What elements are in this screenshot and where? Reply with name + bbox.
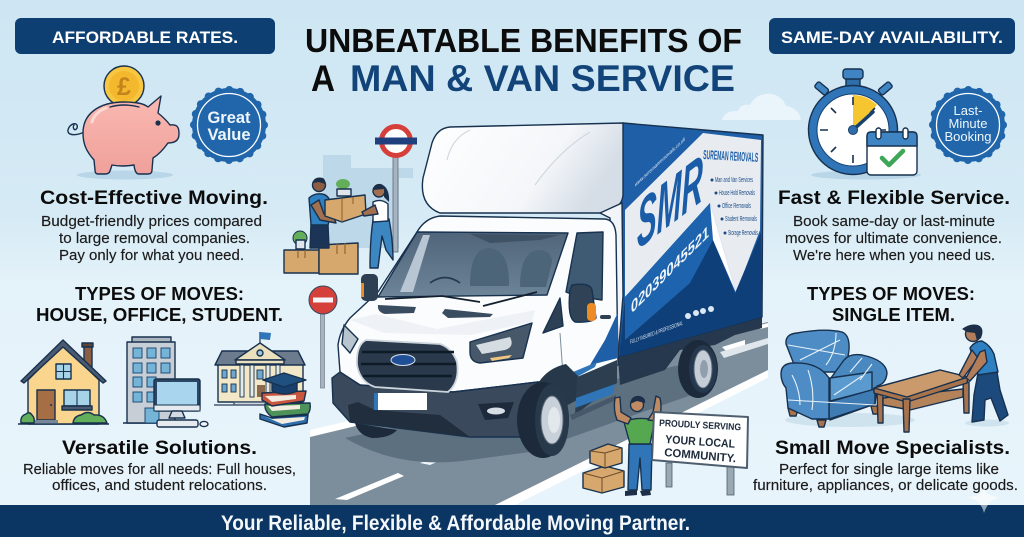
badge: last-minute booking: Last-	[954, 103, 982, 118]
text block: fast and flexible service: Fast & Flexible Service.	[778, 188, 1010, 209]
left headlight	[342, 325, 358, 353]
text block: small move specialists: Perfect for single large items like	[779, 462, 999, 478]
footer banner	[0, 505, 1024, 537]
rear chassis and wheel	[618, 317, 762, 398]
scene: faded city skyline	[323, 155, 413, 248]
number plate	[374, 393, 427, 410]
text block: versatile solutions: offices, and student relocations.	[52, 478, 267, 494]
text block: cost-effective moving: Budget-friendly prices compared	[41, 214, 262, 230]
grille	[357, 340, 458, 392]
text block: fast and flexible service	[778, 188, 1010, 264]
title: A	[311, 58, 335, 99]
stacked boxes	[583, 444, 624, 493]
lower intake	[348, 402, 470, 437]
icon: piggy bank with pound coin	[68, 66, 179, 180]
social icons	[685, 306, 714, 319]
carried box and plant	[325, 179, 366, 222]
community sign: YOUR LOCAL	[665, 434, 735, 451]
badge: last-minute booking: Booking	[945, 129, 991, 144]
text block: small move specialists: furniture, appliances, or delicate goods.	[753, 478, 1018, 494]
title: UNBEATABLE BENEFITS OF	[305, 22, 742, 59]
windscreen	[378, 232, 568, 306]
man	[309, 178, 336, 248]
heading pill: affordable rates: AFFORDABLE RATES.	[52, 28, 238, 47]
community sign: COMMUNITY.	[664, 447, 737, 465]
icon: stopwatch with calendar	[808, 69, 921, 180]
scene: waving man with boxes and community sign	[583, 396, 748, 496]
luton roof	[422, 123, 623, 213]
icon: wrapped armchair	[781, 330, 915, 427]
cab body	[338, 216, 618, 392]
title: MAN & VAN SERVICE	[350, 58, 735, 99]
heading pill: same-day availability: SAME-DAY AVAILABILITY.	[781, 28, 1003, 47]
cab side blue swoosh	[590, 312, 618, 365]
text block: small move specialists	[753, 438, 1018, 494]
text block: versatile solutions: Versatile Solutions.	[62, 438, 257, 459]
heading pill: same-day availability	[769, 18, 1015, 54]
badge: last-minute booking: Minute	[948, 116, 988, 131]
heading: types of moves house office student	[36, 283, 283, 325]
badge: last-minute booking	[931, 88, 1005, 162]
front right wheel	[517, 382, 569, 458]
plant and stacked boxes	[284, 231, 358, 274]
side window	[566, 232, 603, 300]
text block: versatile solutions: Reliable moves for all needs: Full houses,	[23, 462, 296, 478]
icon: house	[18, 340, 109, 424]
icon: sparkle watermark	[967, 487, 1000, 513]
icon: coffee table	[874, 370, 969, 432]
text block: versatile solutions	[23, 438, 296, 494]
text block: cost-effective moving	[40, 188, 268, 264]
text block: cost-effective moving: to large removal companies.	[59, 231, 250, 247]
van	[332, 123, 763, 462]
bonnet vents	[378, 305, 493, 318]
door shut line	[560, 333, 563, 375]
text block: fast and flexible service: Book same-day or last-minute	[793, 214, 995, 230]
sign posts	[666, 463, 734, 495]
heading: types of moves single item	[807, 283, 975, 325]
service list: House Hold Removals	[719, 190, 755, 197]
icon: no entry sign	[309, 286, 337, 388]
community sign	[652, 412, 748, 468]
website: www.suremanremovals.co.uk	[634, 135, 685, 189]
road	[310, 322, 768, 505]
right headlight	[470, 323, 532, 363]
service list: Man and Van Services	[715, 177, 753, 184]
title	[305, 22, 742, 99]
box body side: SMR	[637, 139, 703, 265]
box front lower panel	[600, 203, 623, 357]
fog lamp	[478, 402, 514, 420]
bonnet shading	[350, 310, 535, 335]
infographic canvas: SUREMAN REMOVALS	[703, 147, 759, 165]
icon: office building with computer	[123, 337, 208, 427]
woman	[362, 184, 393, 268]
front left tyre	[355, 423, 397, 438]
service list: Office Removals	[722, 203, 751, 210]
wheel arch and sill	[530, 360, 617, 420]
community sign: PROUDLY SERVING	[659, 418, 741, 433]
icon: man carrying table	[959, 324, 1009, 426]
heading: types of moves house office student: TYPES OF MOVES:	[75, 283, 244, 304]
door mirror	[543, 284, 611, 333]
service list: Student Removals	[725, 216, 757, 223]
heading: types of moves house office student: HOUSE, OFFICE, STUDENT.	[36, 304, 283, 325]
tagline: FULLY INSURED & PROFESSIONAL	[630, 320, 683, 346]
badge: great value: Great	[207, 109, 251, 127]
road shadow	[345, 365, 700, 462]
text block: cost-effective moving: Pay only for what you need.	[59, 248, 244, 264]
icon: cloud	[722, 94, 801, 120]
box body side	[618, 123, 763, 357]
man in green shirt	[614, 396, 661, 496]
text block: fast and flexible service: We're here when you need us.	[793, 248, 995, 264]
footer banner: Your Reliable, Flexible & Affordable Moving Partner.	[221, 512, 690, 535]
heading: types of moves single item: TYPES OF MOVES:	[807, 283, 975, 304]
service list	[710, 177, 758, 237]
text block: cost-effective moving: Cost-Effective Moving.	[40, 188, 268, 209]
front bumper	[332, 372, 538, 437]
badge: great value: Value	[207, 126, 251, 144]
icon: underground sign	[375, 126, 417, 252]
badge: great value	[192, 88, 266, 162]
icon: university with graduation books	[214, 332, 310, 427]
left mirror	[361, 274, 378, 301]
scene: moving couple with boxes	[284, 178, 393, 274]
text block: small move specialists: Small Move Specialists.	[775, 438, 1010, 459]
phone number: 02039045521	[631, 221, 709, 318]
text block: fast and flexible service: moves for ultimate convenience.	[785, 231, 1002, 247]
service list: Storage Removals	[728, 230, 758, 237]
icon: piggy bank with pound coin: £	[117, 73, 131, 101]
heading pill: affordable rates	[15, 18, 275, 54]
heading: types of moves single item: SINGLE ITEM.	[832, 304, 955, 325]
